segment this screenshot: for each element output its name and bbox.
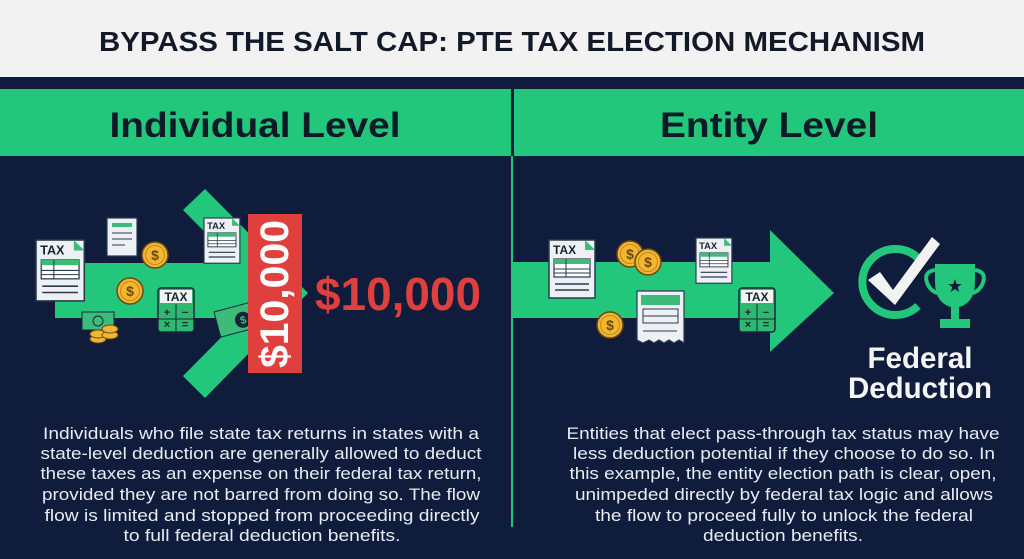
left description text: state-level deduction are generally allowed to deduct xyxy=(40,444,482,463)
right description text: unimpeded directly by federal tax logic and allows xyxy=(575,485,993,504)
header: entity level: Entity Level xyxy=(660,106,878,145)
left description text: these taxes as an expense on their federal tax return, xyxy=(40,464,482,483)
title band xyxy=(0,0,1024,77)
icon: check circle and trophy: ★ xyxy=(947,276,963,296)
federal deduction label: Deduction xyxy=(848,372,992,405)
federal deduction label xyxy=(848,342,992,405)
title: BYPASS THE SALT CAP: PTE TAX ELECTION MECHANISM xyxy=(99,26,925,57)
right description text: deduction benefits. xyxy=(703,526,863,545)
icons: left documents and money xyxy=(36,218,259,343)
right flow arrow (open) xyxy=(512,230,834,352)
red cap barrier: $10,000 xyxy=(253,220,297,368)
header: individual level: Individual Level xyxy=(110,106,400,145)
right description text xyxy=(566,424,1000,545)
icon: check circle and trophy xyxy=(862,237,984,328)
right description text: the flow to proceed fully to unlock the federal xyxy=(595,506,973,525)
left description text: Individuals who file state tax returns in states with a xyxy=(43,424,480,443)
right description text: Entities that elect pass-through tax status may have xyxy=(566,424,1000,443)
icons: right documents and money xyxy=(549,238,775,343)
cap amount label: $10,000 xyxy=(315,268,481,320)
header: individual level xyxy=(0,89,511,156)
left description text: provided they are not barred from doing so. The flow xyxy=(42,485,481,504)
left description text: to full federal deduction benefits. xyxy=(124,526,400,545)
right description text: this example, the entity election path is clear, open, xyxy=(570,464,996,483)
left description text xyxy=(40,424,482,545)
federal deduction label: Federal xyxy=(868,342,972,375)
right description text: less deduction potential if they choose to do so. In xyxy=(573,444,995,463)
header: entity level xyxy=(514,89,1024,156)
left flow arrow (blocked) xyxy=(36,189,308,398)
left description text: flow is limited and stopped from proceeding directly xyxy=(44,506,480,525)
icons: left documents and money: $ xyxy=(239,314,248,327)
